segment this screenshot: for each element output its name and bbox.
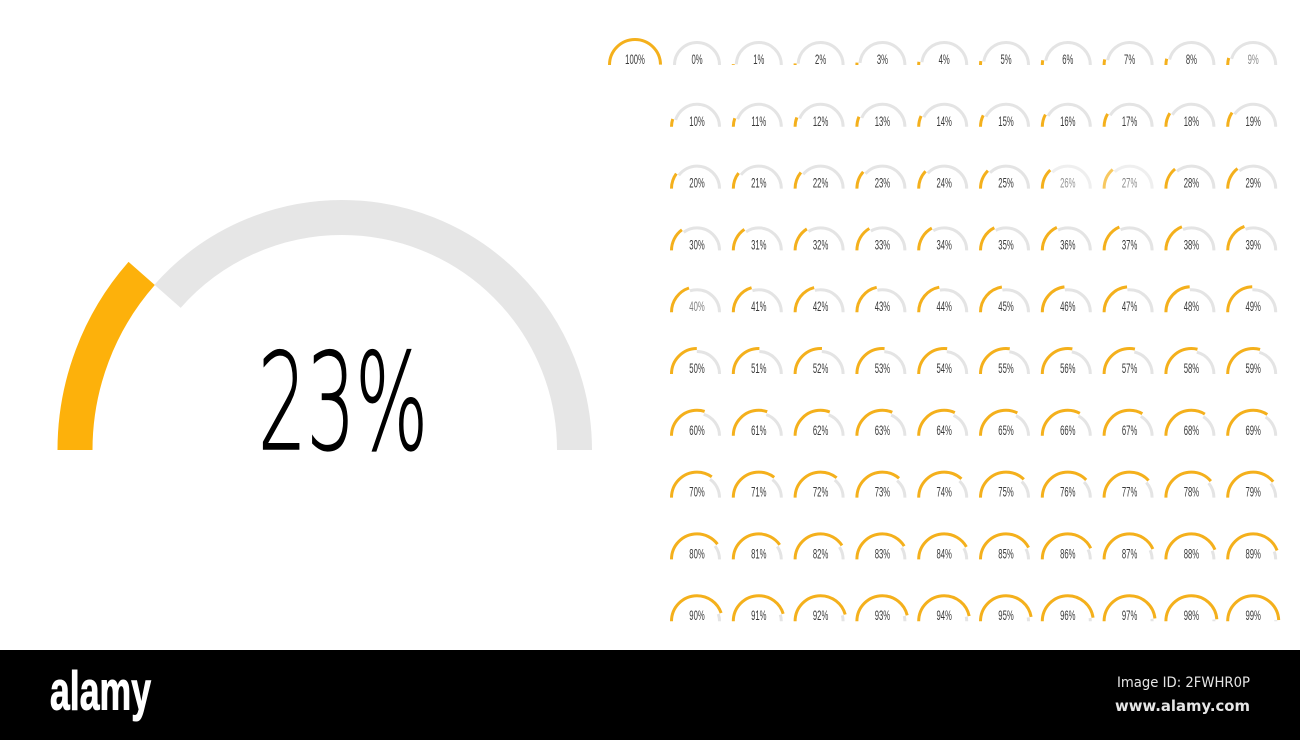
gauge 72% — [795, 472, 846, 500]
gauge 93% — [857, 596, 908, 624]
gauge 28% — [1166, 163, 1217, 191]
gauge 48%: 48% — [1184, 300, 1199, 315]
gauge 11% — [733, 101, 784, 130]
gauge 73%: 73% — [875, 485, 890, 500]
gauge 36%: 36% — [1060, 238, 1075, 253]
gauge 45%: 45% — [998, 300, 1014, 315]
gauge 96%: 96% — [1060, 609, 1075, 624]
gauge 48% — [1166, 287, 1217, 315]
gauge 73% — [857, 472, 908, 500]
gauge 0% — [674, 42, 720, 68]
gauge 75% — [980, 472, 1032, 500]
gauge 52% — [795, 348, 846, 377]
gauge 26%: 26% — [1060, 176, 1075, 191]
website address: www.alamy.com — [1115, 697, 1250, 715]
gauge 5% — [980, 40, 1032, 68]
gauge 84%: 84% — [937, 547, 952, 562]
gauge 6% — [1042, 40, 1093, 68]
gauge 14%: 14% — [937, 115, 952, 130]
gauge 58% — [1166, 348, 1217, 377]
gauge 31%: 31% — [751, 238, 766, 253]
large gauge at 23% — [75, 183, 609, 481]
gauge 20%: 20% — [689, 176, 705, 191]
gauge 32%: 32% — [813, 238, 828, 253]
gauge 11%: 11% — [751, 115, 766, 130]
gauge 26% — [1042, 163, 1093, 191]
gauge 43% — [857, 287, 908, 315]
gauge 53% — [857, 348, 908, 377]
gauge 55% — [980, 348, 1032, 377]
gauge 62% — [795, 410, 846, 439]
gauge 90%: 90% — [689, 609, 705, 624]
gauge 95%: 95% — [998, 609, 1014, 624]
gauge 21% — [733, 163, 784, 191]
gauge 50%: 50% — [689, 362, 705, 377]
gauge 37%: 37% — [1122, 238, 1137, 253]
gauge 13%: 13% — [875, 115, 890, 130]
gauge 38%: 38% — [1184, 238, 1199, 253]
gauge 76%: 76% — [1060, 485, 1075, 500]
large percentage value: 23% — [258, 325, 428, 481]
gauge 56%: 56% — [1060, 362, 1075, 377]
gauge 1% — [733, 40, 784, 68]
gauge 38% — [1166, 225, 1217, 253]
gauge 12% — [795, 101, 846, 130]
gauge 1%: 1% — [753, 53, 764, 68]
gauge 25%: 25% — [998, 176, 1014, 191]
gauge 77%: 77% — [1122, 485, 1137, 500]
gauge 83%: 83% — [875, 547, 890, 562]
gauge 95% — [980, 596, 1032, 624]
gauge 35%: 35% — [998, 238, 1014, 253]
gauge 41% — [733, 287, 784, 315]
gauge 85% — [980, 534, 1032, 562]
gauge 29%: 29% — [1246, 176, 1261, 191]
gauge 34% — [919, 225, 970, 253]
gauge 40%: 40% — [689, 300, 705, 315]
gauge 74% — [919, 472, 970, 500]
gauge 91% — [733, 596, 784, 624]
gauge 100%: 100% — [625, 53, 645, 68]
gauge 79% — [1228, 472, 1279, 500]
gauge 87%: 87% — [1122, 547, 1137, 562]
gauge 33% — [857, 225, 908, 253]
alamy logo: alamy — [50, 660, 151, 722]
gauge 80% — [672, 534, 722, 562]
gauge 57%: 57% — [1122, 362, 1137, 377]
gauge 7% — [1104, 40, 1155, 68]
gauge 82%: 82% — [813, 547, 828, 562]
gauge 17% — [1104, 101, 1155, 130]
gauge 7%: 7% — [1124, 53, 1135, 68]
gauge 81%: 81% — [751, 547, 766, 562]
gauge 70% — [672, 472, 722, 500]
gauge 42% — [795, 287, 846, 315]
image id: Image ID: 2FWHR0P — [1117, 675, 1250, 691]
gauge 70%: 70% — [689, 485, 705, 500]
gauge 22% — [795, 163, 846, 191]
gauge 64% — [919, 410, 970, 439]
gauge 92%: 92% — [813, 609, 828, 624]
gauge 61% — [733, 410, 784, 439]
gauge 15%: 15% — [998, 115, 1014, 130]
gauge grid — [610, 40, 1279, 624]
gauge 93%: 93% — [875, 609, 890, 624]
large gauge value arc — [75, 183, 609, 450]
gauge 86% — [1042, 534, 1093, 562]
gauge 91%: 91% — [751, 609, 766, 624]
gauge 28%: 28% — [1184, 176, 1199, 191]
gauge 21%: 21% — [751, 176, 766, 191]
gauge 54%: 54% — [937, 362, 952, 377]
gauge 8% — [1166, 40, 1217, 68]
gauge 20% — [672, 163, 722, 191]
gauge 42%: 42% — [813, 300, 828, 315]
gauge 78%: 78% — [1184, 485, 1199, 500]
black footer bar — [0, 650, 1300, 740]
gauge 0%: 0% — [691, 53, 703, 68]
gauge 10% — [672, 101, 722, 130]
gauge 49% — [1228, 287, 1279, 315]
gauge 2%: 2% — [815, 53, 826, 68]
gauge 44%: 44% — [937, 300, 952, 315]
gauge 80%: 80% — [689, 547, 705, 562]
gauge 63%: 63% — [875, 424, 890, 439]
gauge 79%: 79% — [1246, 485, 1261, 500]
gauge 29% — [1228, 163, 1279, 191]
gauge 85%: 85% — [998, 547, 1014, 562]
gauge 44% — [919, 287, 970, 315]
gauge 57% — [1104, 348, 1155, 377]
gauge 60%: 60% — [689, 424, 705, 439]
gauge 5%: 5% — [1000, 53, 1012, 68]
gauge 4% — [919, 40, 970, 68]
gauge 66%: 66% — [1060, 424, 1075, 439]
gauge 99% — [1228, 596, 1279, 624]
gauge 69%: 69% — [1246, 424, 1261, 439]
gauge 100% — [610, 40, 660, 68]
gauge 51%: 51% — [751, 362, 766, 377]
gauge 81% — [733, 534, 784, 562]
gauge 24%: 24% — [937, 176, 952, 191]
gauge 49%: 49% — [1246, 300, 1261, 315]
gauge 6%: 6% — [1062, 53, 1073, 68]
gauge 39% — [1228, 225, 1279, 253]
gauge 2% — [795, 40, 846, 68]
gauge 27% — [1104, 163, 1155, 191]
gauge 46% — [1042, 287, 1093, 315]
gauge 41%: 41% — [751, 300, 766, 315]
gauge 16% — [1042, 101, 1093, 130]
gauge 4%: 4% — [939, 53, 950, 68]
gauge 18% — [1166, 101, 1217, 130]
large gauge track — [110, 218, 574, 450]
gauge 90% — [672, 596, 722, 624]
gauge 67% — [1104, 410, 1155, 439]
gauge 98%: 98% — [1184, 609, 1199, 624]
gauge 86%: 86% — [1060, 547, 1075, 562]
gauge 99%: 99% — [1246, 609, 1261, 624]
gauge 58%: 58% — [1184, 362, 1199, 377]
gauge 96% — [1042, 596, 1093, 624]
gauge 50% — [672, 348, 722, 377]
gauge 76% — [1042, 472, 1093, 500]
gauge 83% — [857, 534, 908, 562]
gauge 66% — [1042, 410, 1093, 439]
gauge 23% — [857, 163, 908, 191]
gauge 69% — [1228, 410, 1279, 439]
gauge 68% — [1166, 410, 1217, 439]
gauge 67%: 67% — [1122, 424, 1137, 439]
gauge 24% — [919, 163, 970, 191]
gauge 9% — [1228, 40, 1279, 68]
gauge 17%: 17% — [1122, 115, 1137, 130]
gauge 74%: 74% — [937, 485, 952, 500]
gauge 47%: 47% — [1122, 300, 1137, 315]
gauge 54% — [919, 348, 970, 377]
gauge 36% — [1042, 225, 1093, 253]
gauge 88%: 88% — [1184, 547, 1199, 562]
gauge 22%: 22% — [813, 176, 828, 191]
gauge 34%: 34% — [937, 238, 952, 253]
gauge 59%: 59% — [1246, 362, 1261, 377]
gauge 89% — [1228, 534, 1279, 562]
gauge 13% — [857, 101, 908, 130]
gauge 15% — [980, 101, 1032, 130]
gauge 45% — [980, 287, 1032, 315]
gauge 32% — [795, 225, 846, 253]
gauge 71%: 71% — [751, 485, 766, 500]
gauge 16%: 16% — [1060, 115, 1075, 130]
gauge 8%: 8% — [1186, 53, 1197, 68]
gauge 84% — [919, 534, 970, 562]
gauge 51% — [733, 348, 784, 377]
gauge 88% — [1166, 534, 1217, 562]
gauge 40% — [672, 287, 722, 315]
gauge 14% — [919, 101, 970, 130]
gauge 56% — [1042, 348, 1093, 377]
gauge 18%: 18% — [1184, 115, 1199, 130]
gauge 19%: 19% — [1246, 115, 1261, 130]
gauge 98% — [1166, 596, 1217, 624]
gauge 68%: 68% — [1184, 424, 1199, 439]
gauge 78% — [1166, 472, 1217, 500]
gauge 94% — [919, 596, 970, 624]
gauge 59% — [1228, 348, 1279, 377]
gauge 55%: 55% — [998, 362, 1014, 377]
gauge 97% — [1104, 596, 1155, 624]
gauge 72%: 72% — [813, 485, 828, 500]
gauge 89%: 89% — [1246, 547, 1261, 562]
gauge 12%: 12% — [813, 115, 828, 130]
gauge 31% — [733, 225, 784, 253]
gauge 77% — [1104, 472, 1155, 500]
gauge 64%: 64% — [937, 424, 952, 439]
gauge 43%: 43% — [875, 300, 890, 315]
gauge 25% — [980, 163, 1032, 191]
gauge 30% — [672, 225, 722, 253]
gauge 27%: 27% — [1122, 176, 1137, 191]
gauge 61%: 61% — [751, 424, 766, 439]
gauge 63% — [857, 410, 908, 439]
gauge 65% — [980, 410, 1032, 439]
gauge 82% — [795, 534, 846, 562]
gauge 33%: 33% — [875, 238, 890, 253]
gauge 3%: 3% — [877, 53, 888, 68]
gauge 65%: 65% — [998, 424, 1014, 439]
gauge 94%: 94% — [937, 609, 952, 624]
gauge 87% — [1104, 534, 1155, 562]
gauge 9%: 9% — [1248, 53, 1259, 68]
gauge 62%: 62% — [813, 424, 828, 439]
gauge 97%: 97% — [1122, 609, 1137, 624]
gauge 53%: 53% — [875, 362, 890, 377]
gauge 47% — [1104, 287, 1155, 315]
gauge 60% — [672, 410, 722, 439]
gauge 30%: 30% — [689, 238, 705, 253]
gauge 75%: 75% — [998, 485, 1014, 500]
gauge 19% — [1228, 101, 1279, 130]
gauge 23%: 23% — [875, 176, 890, 191]
gauge 52%: 52% — [813, 362, 828, 377]
gauge 46%: 46% — [1060, 300, 1075, 315]
gauge 37% — [1104, 225, 1155, 253]
gauge 71% — [733, 472, 784, 500]
gauge 3% — [857, 40, 908, 68]
gauge 10%: 10% — [689, 115, 705, 130]
gauge 39%: 39% — [1246, 238, 1261, 253]
gauge 35% — [980, 225, 1032, 253]
gauge 92% — [795, 596, 846, 624]
